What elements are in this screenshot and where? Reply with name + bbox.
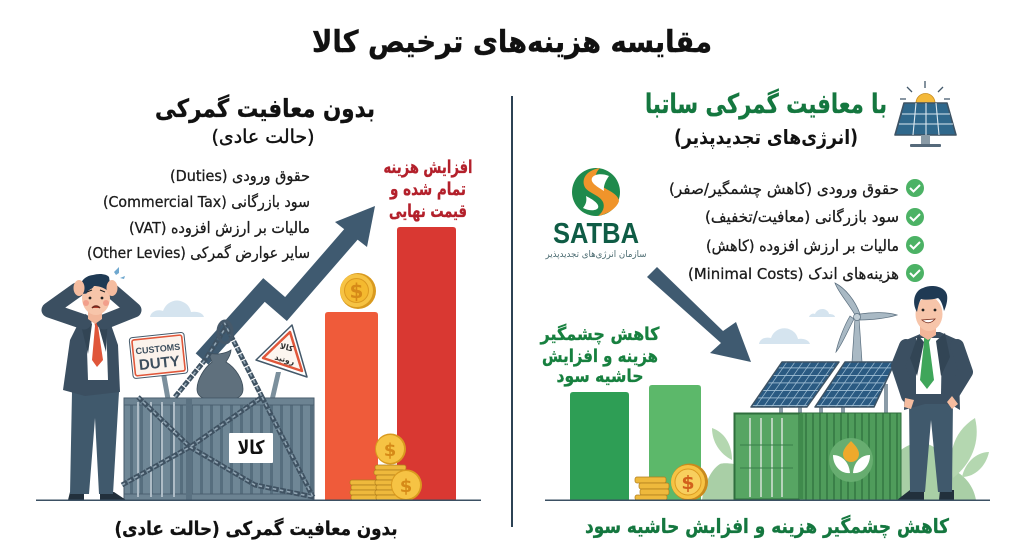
green callout	[540, 323, 660, 387]
right caption: کاهش چشمگیر هزینه و افزایش حاشیه سود	[585, 514, 949, 539]
benefit 4: هزینه‌های اندک (Minimal Costs)	[688, 265, 899, 283]
small clouds	[759, 309, 835, 344]
happy businessman	[897, 286, 966, 500]
icon: solar panel with sun	[895, 81, 956, 147]
left cost list: سایر عوارض گمرکی (Other Levies)	[87, 244, 310, 262]
green callout: حاشیه سود	[556, 366, 644, 387]
container label	[229, 433, 273, 463]
container leaf emblem	[829, 438, 873, 482]
left subheading: (حالت عادی)	[212, 126, 314, 148]
coin on orange bar	[340, 273, 376, 309]
panel: with SATBA exemption	[540, 81, 990, 539]
red callout: قیمت نهایی	[389, 201, 467, 222]
bushes and leaves	[702, 418, 989, 500]
green callout: هزینه و افزایش	[542, 346, 658, 367]
title: مقایسه هزینه‌های ترخیص کالا	[312, 25, 712, 60]
left ground line	[36, 500, 481, 501]
container label: کالا	[238, 437, 265, 459]
customs duty sign	[129, 332, 188, 399]
benefit 2: سود بازرگانی (معافیت/تخفیف)	[705, 208, 899, 226]
falling arrow	[647, 267, 751, 362]
benefit 1: حقوق ورودی (کاهش چشمگیر/صفر)	[669, 180, 899, 199]
left heading: بدون معافیت گمرکی	[155, 94, 375, 124]
cloud	[150, 300, 204, 317]
worried businessman	[49, 267, 134, 500]
warning sign	[256, 325, 307, 398]
SATBA subtitle: سازمان انرژی‌های تجدیدپذیر	[545, 250, 646, 260]
light green bar	[649, 385, 701, 500]
warning sign: کالا	[279, 341, 295, 354]
left cost list: مالیات بر ارزش افزوده (VAT)	[129, 219, 310, 238]
right ground line	[545, 500, 990, 501]
dark green bar	[570, 392, 629, 500]
wind turbine	[835, 283, 897, 362]
coin stacks: $	[384, 440, 396, 461]
red callout: تمام شده و	[389, 179, 466, 200]
panel: without exemption	[36, 94, 481, 540]
green callout: کاهش چشمگیر	[540, 323, 660, 345]
red callout	[384, 157, 472, 222]
left cost list	[87, 167, 310, 262]
SATBA wordmark: SATBA	[553, 218, 639, 250]
SATBA logo	[553, 168, 639, 250]
benefit 3: مالیات بر ارزش افزوده (کاهش)	[706, 237, 899, 256]
coin and stack: $	[681, 472, 695, 494]
red callout: افزایش هزینه	[384, 157, 472, 178]
grey container	[124, 398, 314, 500]
green container	[734, 413, 901, 500]
chains	[122, 321, 314, 497]
customs duty sign: CUSTOMS	[135, 342, 181, 356]
customs duty sign: DUTY	[138, 353, 181, 374]
center divider	[511, 96, 513, 527]
left caption: بدون معافیت گمرکی (حالت عادی)	[114, 517, 398, 540]
right heading: با معافیت گمرکی ساتبا	[645, 88, 887, 120]
coin on orange bar: $	[350, 279, 363, 303]
money bag	[197, 350, 243, 398]
coin stacks: $	[400, 476, 412, 497]
left cost list: حقوق ورودی (Duties)	[170, 167, 310, 186]
coin stacks	[350, 434, 422, 500]
coin and stack	[635, 464, 708, 500]
right benefits list	[669, 179, 924, 283]
orange bar	[325, 312, 378, 500]
solar panels	[751, 362, 895, 414]
warning sign: روتید	[274, 353, 296, 367]
rising arrow	[202, 206, 375, 359]
left cost list: سود بازرگانی (Commercial Tax)	[103, 193, 310, 211]
right subheading: (انرژی‌های تجدیدپذیر)	[674, 125, 858, 150]
red bar	[397, 227, 456, 500]
